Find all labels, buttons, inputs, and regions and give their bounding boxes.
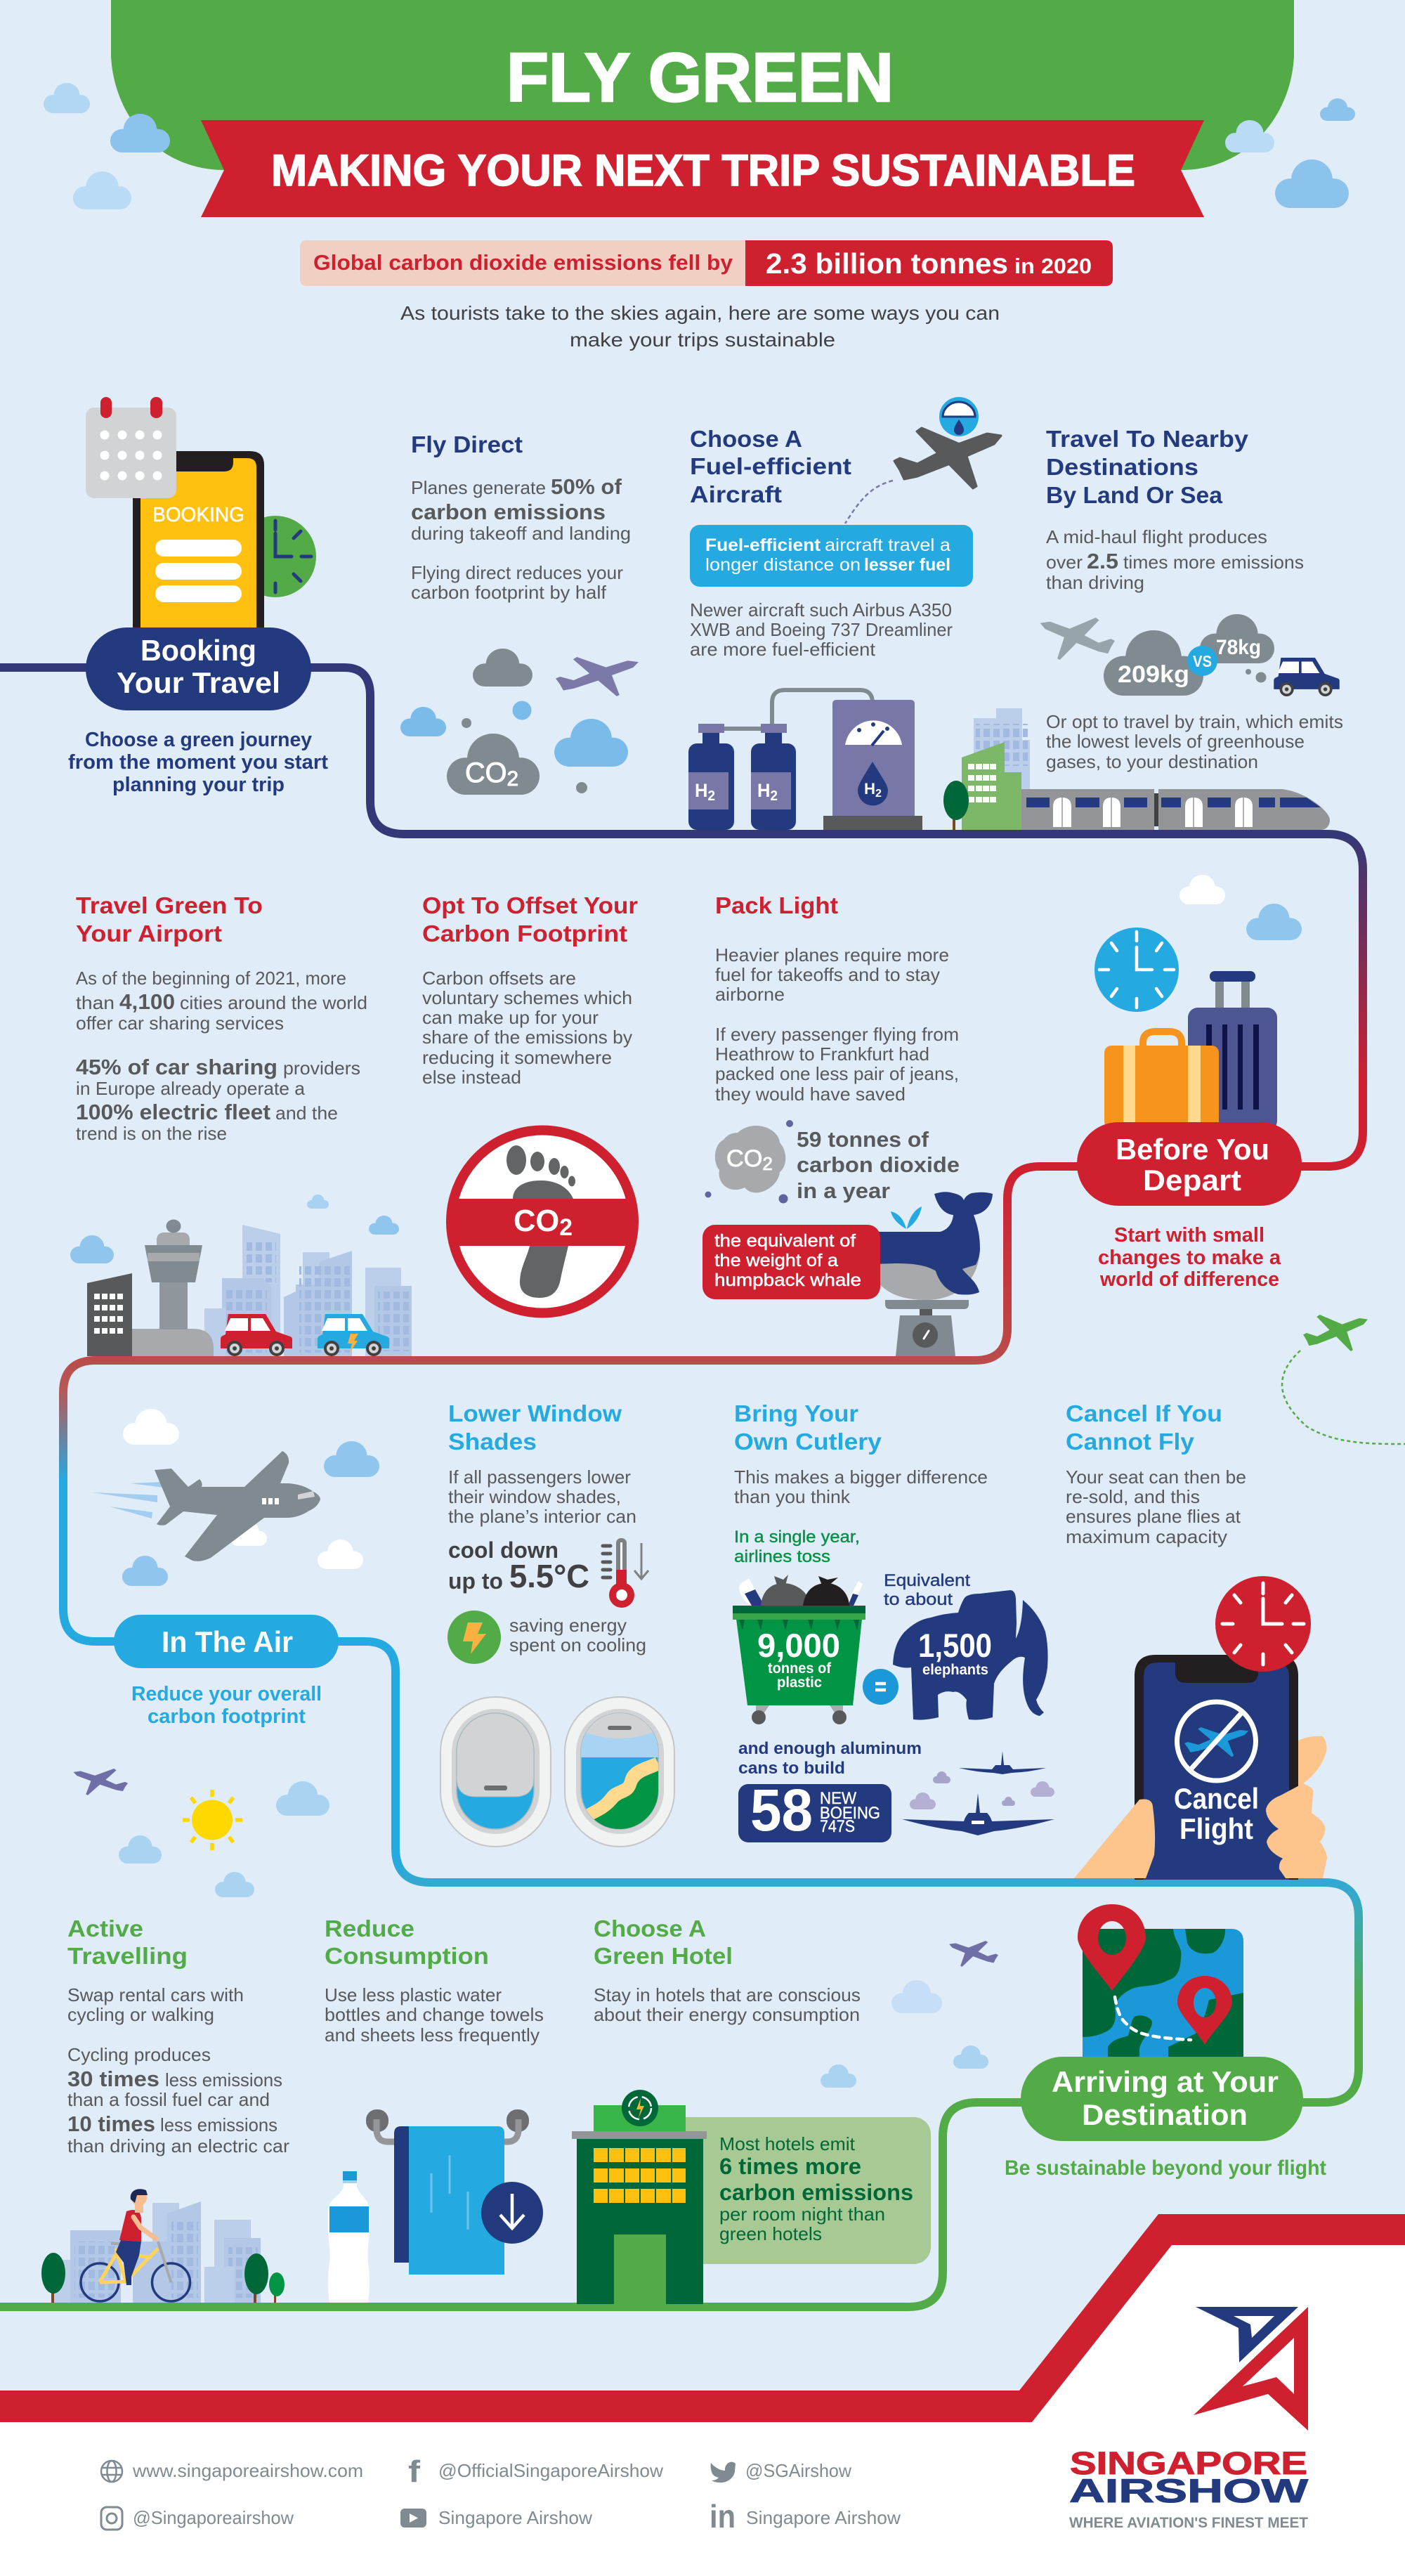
heading: Destinations [1046,454,1198,480]
green subhead [734,1528,860,1566]
heading: Choose A [594,1915,706,1941]
tip: travel by land or sea [943,426,1343,830]
illustration: phone with cancel flight: Flight [1179,1812,1253,1845]
clouds [1179,875,1302,940]
clouds [122,1409,379,1586]
callout: hotel emissions: carbon emissions [719,2180,913,2205]
facebook handle: @OfficialSingaporeAirshow [438,2460,663,2481]
heading [1046,426,1249,508]
icon: water bottle [328,2171,370,2303]
title: FLY GREEN [507,39,894,116]
icon: booking phone [133,451,264,627]
icon: youtube [400,2509,426,2528]
body text: bottles and change towels [325,2004,544,2025]
body text: and sheets less frequently [325,2024,540,2045]
callout: hotel emissions: per room night than [719,2204,885,2225]
icon: plane with gauge [845,397,1001,523]
section: booking your travel [68,397,328,796]
illustration: map with pins [1078,1904,1243,2059]
heading: Travel Green To [76,892,263,918]
callout: humpback whale: the equivalent of [714,1231,856,1251]
tagline: Reduce your overall [131,1683,322,1705]
logo: singapore airshow: AIRSHOW [1069,2472,1309,2509]
body text: packed one less pair of jeans, [715,1063,959,1084]
illustration: towel rail [366,2109,543,2275]
illustration: flying plane [93,1451,320,1561]
illustration: hydrogen tanks and pump: H [695,780,708,801]
body text [448,1466,636,1527]
logo: singapore airshow [1069,2307,1309,2531]
heading [448,1400,622,1455]
illustration: plane window open [565,1697,674,1847]
pill: booking your travel [86,627,311,710]
body text: 4,100 [119,989,175,1014]
heading: Reduce [325,1915,414,1941]
tip: travel green to your airport [70,892,412,1356]
icon: energy bolt [447,1611,501,1664]
illustration: airport and cars [70,1195,412,1356]
intro text: make your trips sustainable [570,329,835,351]
icon: twitter [711,2462,736,2483]
illustration: rubbish bin: 9,000 [757,1627,840,1664]
icon: calendar [86,397,176,498]
section: arriving at your destination [821,1904,1326,2180]
tip: choose a green hotel [572,1915,931,2304]
pill: arriving at your destination [1021,2057,1303,2141]
body text [67,1984,289,2157]
stat: 58 boeing [738,1777,891,1843]
logo wordmark: SINGAPORE [1070,2445,1307,2481]
twitter handle: @SGAirshow [745,2460,851,2481]
body text: cities around the world [180,992,367,1013]
heading: Cannot Fly [1066,1429,1195,1455]
body text: reducing it somewhere [422,1047,612,1068]
illustration: hydrogen tanks and pump: 2 [707,788,715,804]
body text: less emissions [160,2114,277,2135]
body text: As of the beginning of 2021, more [76,968,346,989]
heading: Opt To Offset Your [422,892,638,918]
tip: cancel if you cannot fly [1066,1400,1327,1880]
body text: offer car sharing services [76,1013,284,1034]
heading: Pack Light [715,892,838,918]
icon: co2 footprint badge [450,1130,635,1313]
aluminum text [738,1739,922,1778]
body text: about their energy consumption [594,2004,860,2025]
stat: 58 boeing: 747S [820,1817,855,1836]
illustration: hydrogen tanks and pump [688,690,922,830]
callout: hotel emissions: green hotels [719,2223,822,2244]
illustration: rubbish bin: tonnes of [768,1660,832,1677]
callout [690,525,973,587]
heading: Travel To Nearby [1046,426,1249,452]
callout: humpback whale: the weight of a [714,1251,838,1270]
body text: train: the lowest levels of greenhouse [1046,731,1305,752]
callout: hotel emissions [667,2117,931,2264]
body text: XWB and Boeing 737 Dreamliner [690,619,953,640]
stat: 58 boeing: NEW [820,1789,856,1808]
heading [67,1915,188,1969]
tip: active travelling [41,1915,289,2303]
body text: Your seat can then be [1066,1466,1246,1488]
youtube name: Singapore Airshow [438,2507,592,2528]
illustration: cyclist and city [41,2189,285,2303]
illustration: hydrogen tanks and pump: H [757,780,771,801]
illustration: phone with cancel flight: Cancel [1174,1782,1259,1815]
body text: 100% electric fleet [76,1100,270,1124]
pill: arriving at your destination: Arriving at Your [1052,2065,1279,2098]
body text: than [76,992,115,1013]
body text: they would have saved [715,1084,906,1105]
illustration: rubbish bin [733,1575,865,1724]
illustration: clouds and co2 [400,649,639,795]
heading: Travelling [67,1943,188,1969]
saving energy text: saving energy [509,1615,627,1636]
saving energy text: spent on cooling [509,1634,646,1655]
body text: cycling or walking [67,2004,214,2025]
logo mark [1194,2307,1308,2431]
icon: equals [863,1669,898,1705]
heading: Green Hotel [594,1943,733,1969]
callout: humpback whale: humpback whale [714,1270,861,1290]
heading: Shades [448,1429,537,1455]
illustration: whale on scale [867,1192,993,1356]
green header shape [111,0,1294,170]
illustration: phone with cancel flight [1074,1655,1327,1880]
chart: plane vs car emissions: 209kg [1118,661,1189,688]
body text: than driving [1046,572,1144,593]
header clouds [44,83,1355,209]
stat: 59 tonnes: in a year [797,1178,890,1203]
body text: trend is on the rise [76,1123,227,1144]
heading [1066,1400,1222,1455]
body text: Use less plastic water [325,1984,502,2005]
body text: train [1046,711,1343,772]
body text: fuel for takeoffs and to stay [715,964,940,985]
pill: before you depart: Before You [1116,1133,1269,1166]
illustration: elephant: elephants [922,1662,988,1678]
icon: green clock [235,516,316,597]
heading [594,1915,733,1969]
callout: aircraft travel a [825,535,950,555]
body text: Cycling produces [67,2044,211,2065]
icon: co2 footprint badge: CO [514,1204,560,1238]
linkedin name: Singapore Airshow [746,2507,901,2528]
tagline: Start with small [1114,1224,1264,1247]
section: before you depart [1077,875,1302,1291]
body text [715,944,959,1105]
heading: Fuel-efficient [690,453,851,479]
chart: plane vs car emissions [1040,614,1340,696]
tip: reduce consumption [325,1915,544,2303]
pill: in the air: In The Air [162,1625,293,1658]
icon: instagram [101,2507,122,2530]
body text [422,968,632,1088]
body text: times more emissions [1123,552,1304,573]
heading: Own Cutlery [734,1429,882,1455]
body text: re-sold, and this [1066,1486,1200,1507]
equivalent text: to about [884,1590,953,1609]
heading: Choose A [690,426,802,452]
stat: 59 tonnes [797,1127,960,1203]
website: www.singaporeairshow.com [132,2460,363,2481]
icon: booking phone: BOOKING [152,504,244,526]
tip: bring your own cutlery [733,1400,1054,1843]
body text: train: Or opt to travel by train, which emits [1046,711,1343,732]
tip: fly direct [400,431,639,795]
body text: in Europe already operate a [76,1078,306,1099]
body text: are more fuel-efficient [690,639,876,660]
body text: the plane’s interior can [448,1506,636,1527]
heading [422,892,638,947]
header banner [111,0,1294,217]
heading: Aircraft [690,481,782,507]
tagline [131,1683,322,1728]
body text: If every passenger flying from [715,1024,959,1045]
green subhead: airlines toss [734,1547,830,1566]
heading [690,426,851,507]
chart: plane vs car emissions: 78kg [1216,636,1261,659]
tip: fuel-efficient aircraft [688,397,1001,830]
body text: Heavier planes require more [715,944,949,965]
body text: If all passengers lower [448,1466,631,1488]
callout: hotel emissions: 6 times more [719,2154,861,2179]
icon: co2 cloud [705,1120,793,1203]
body text: 30 times [67,2067,159,2091]
plane and clouds [821,1941,998,2088]
emissions stat bar: 2.3 billion tonnes [766,247,1008,280]
heading [734,1400,882,1455]
body text: train: gases, to your destination [1046,751,1258,772]
illustration: elephant: 1,500 [918,1627,992,1664]
icon: thermometer [603,1538,648,1608]
body text: A mid-haul flight produces [1046,526,1267,547]
callout: Fuel-efficient [705,535,821,555]
tip: pack light [702,892,993,1356]
icon: facebook: f [408,2454,420,2489]
tagline: Choose a green journey [85,729,312,751]
icon: linkedin: in [710,2498,736,2535]
body text: Flying direct reduces your [411,562,623,583]
icon: co2 cloud: CO [726,1145,762,1172]
heading: Cancel If You [1066,1400,1222,1426]
callout: hotel emissions: Most hotels emit [719,2133,856,2154]
body text: over [1046,552,1083,573]
body text: Swap rental cars with [67,1984,244,2005]
pill: arriving at your destination: Destination [1082,2098,1248,2131]
stat: cool down: cool down [448,1537,558,1563]
body text: can make up for your [422,1007,599,1028]
equivalent text: Equivalent [884,1571,970,1590]
body text: Heathrow to Frankfurt had [715,1043,929,1065]
body text [325,1984,544,2045]
tagline [68,729,328,796]
body text [594,1984,861,2025]
tagline [1098,1224,1281,1291]
pill: in the air [114,1615,339,1668]
heading: Active [67,1915,143,1941]
stat: cool down: up to [448,1568,503,1594]
illustration: clouds and co2: CO [465,757,507,788]
body text [76,968,367,1144]
illustration: hydrogen tanks and pump: 2 [875,788,882,800]
body text: Planes generate [411,477,546,498]
body text: carbon footprint by half [411,582,607,603]
body text: than driving an electric car [67,2135,289,2157]
tip: offset your carbon footprint [422,892,638,1313]
body text [1066,1466,1246,1547]
tagline: world of difference [1099,1268,1279,1291]
red ribbon [201,120,1204,217]
callout: lesser fuel [864,555,950,575]
heading: Your Airport [76,921,222,947]
section: in the air [73,1409,379,1897]
pill: booking your travel: Booking [140,634,256,667]
body text: 50% of [551,474,622,499]
footer social links [101,2454,901,2535]
stat: 59 tonnes: 59 tonnes of [797,1127,929,1152]
pill: before you depart [1077,1122,1302,1206]
body text: carbon emissions [411,500,606,524]
heading [76,892,263,947]
pill: before you depart: Depart [1143,1164,1241,1197]
stat: 59 tonnes: carbon dioxide [797,1152,960,1177]
body text: than you think [734,1486,851,1507]
body text: during takeoff and landing [411,523,631,544]
body text: share of the emissions by [422,1027,632,1048]
body text: Carbon offsets are [422,968,576,989]
stat: cool down [448,1537,589,1594]
chart: plane vs car emissions: VS [1193,652,1212,670]
heading: Carbon Footprint [422,921,627,947]
callout: humpback whale [702,1225,880,1299]
body text [411,474,631,603]
tagline: Be sustainable beyond your flight [1005,2157,1326,2180]
emissions stat bar: in 2020 [1014,254,1092,278]
illustration: city and train [943,708,1330,830]
stat: 58 boeing: 58 [750,1777,813,1843]
icon: globe [101,2461,122,2482]
tagline: from the moment you start [68,751,328,774]
heading: Fly Direct [411,431,523,457]
footer white panel with red frame [0,2214,1405,2576]
callout: longer distance on [705,555,861,575]
logo: singapore airshow: WHERE AVIATION'S FINEST MEET [1069,2515,1308,2531]
body text: airborne [715,984,785,1005]
illustration: hydrogen tanks and pump: H [864,780,875,798]
illustration: rubbish bin: plastic [777,1674,822,1691]
body text [1046,526,1304,593]
tagline: changes to make a [1098,1247,1281,1269]
emissions stat bar: Global carbon dioxide emissions fell by [313,250,733,275]
icon: red clock [1215,1576,1311,1672]
body text: 45% of car sharing [76,1055,277,1079]
green subhead: In a single year, [734,1528,860,1547]
illustration: boeing planes and clouds [902,1751,1054,1835]
body text: their window shades, [448,1486,621,1507]
illustration: hydrogen tanks and pump: 2 [770,788,778,804]
aluminum text: and enough aluminum [738,1739,922,1758]
tip: lower window shades [440,1400,674,1847]
tagline: carbon footprint [148,1705,306,1728]
icon: suitcases [1104,971,1277,1131]
body text: ensures plane flies at [1066,1506,1241,1527]
icon: co2 cloud: 2 [762,1153,773,1174]
body text: and the [275,1102,338,1124]
body text: Stay in hotels that are conscious [594,1984,861,2005]
journey route line [0,668,1363,2307]
body text: 2.5 [1087,549,1118,573]
tagline: planning your trip [112,774,285,796]
subtitle: MAKING YOUR NEXT TRIP SUSTAINABLE [271,146,1135,195]
body text: maximum capacity [1066,1526,1227,1547]
illustration: elephant [893,1590,1048,1720]
stat: cool down: 5.5°C [509,1558,589,1594]
saving energy text [509,1615,646,1655]
body text: providers [283,1058,360,1079]
heading: Consumption [325,1943,489,1969]
heading: By Land Or Sea [1046,482,1223,508]
icon: blue clock [1094,928,1179,1012]
body text: This makes a bigger difference [734,1466,988,1488]
body text: voluntary schemes which [422,987,632,1008]
instagram handle: @Singaporeairshow [133,2507,294,2528]
illustration: plane window closed [440,1697,551,1847]
illustration: clouds and co2: 2 [507,767,518,791]
illustration: sun, plane and clouds [73,1769,329,1897]
body text [690,599,953,660]
equivalent text [884,1571,970,1609]
stat: 58 boeing: BOEING [820,1804,880,1823]
illustration: hotel building [572,2090,707,2304]
emissions stat bar [300,240,1113,286]
aluminum text: cans to build [738,1759,845,1778]
heading: Bring Your [734,1400,858,1426]
intro text: As tourists take to the skies again, here are some ways you can [400,302,1000,324]
body text [734,1466,988,1507]
body text: Newer aircraft such Airbus A350 [690,599,952,620]
body text: than a fossil fuel car and [67,2089,270,2110]
icon: co2 footprint badge: 2 [559,1214,573,1241]
pill: booking your travel: Your Travel [117,666,280,699]
intro text [400,302,1000,351]
icon: green plane with dashed trail [1282,1315,1405,1444]
body text: less emissions [165,2069,282,2090]
body text: else instead [422,1067,521,1088]
heading: Lower Window [448,1400,622,1426]
body text: 10 times [67,2112,155,2136]
heading [325,1915,489,1969]
